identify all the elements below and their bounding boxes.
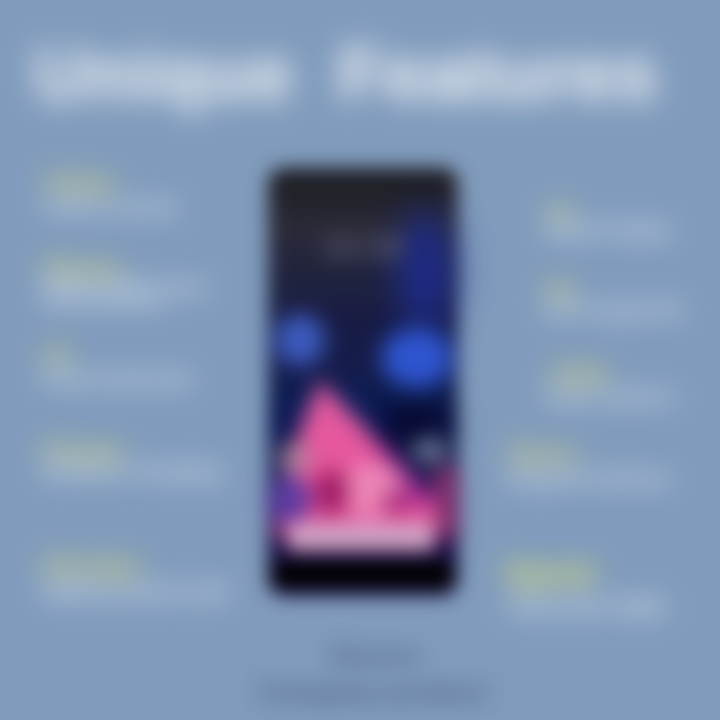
feature 2 left: Photo <box>42 253 121 284</box>
feature 5 left: Design <box>42 549 142 582</box>
feature 1 left: Video <box>42 167 118 198</box>
feature 4 right: Store <box>507 438 579 469</box>
feature 2 right: Hi <box>545 275 573 306</box>
blue blobs <box>275 314 453 388</box>
feature 1 left: Vision screen <box>42 196 178 219</box>
footer note <box>257 640 488 710</box>
feature 4 left: Wireless charging <box>42 460 223 483</box>
feature list: left column <box>32 163 230 611</box>
feature 5 left: Military grade built <box>42 581 229 604</box>
footer line 2: Company product <box>257 677 488 707</box>
feature 1 right: AI <box>545 196 573 227</box>
feature 2 right <box>536 274 684 328</box>
feature 4 right <box>500 435 670 497</box>
feature 4 left: Power <box>42 435 126 466</box>
feature 5 left <box>34 546 230 611</box>
feature 4 right: Expand memory <box>507 467 670 490</box>
feature 2 left: Wide angle lens+ <box>42 276 213 299</box>
feature 5 right: Octa core chips <box>509 595 667 618</box>
feature 4 left <box>33 432 225 491</box>
feature 3 left: UI <box>42 339 70 370</box>
feature 2 left: with manual mode <box>42 294 164 310</box>
feature 3 right: Face unlock I <box>545 386 678 409</box>
feature 5 right: Speed <box>504 557 594 590</box>
feature list: right column <box>496 196 684 627</box>
feature 1 left <box>36 163 178 224</box>
feature 5 right <box>496 552 669 627</box>
feature 3 right <box>540 354 678 414</box>
phone <box>252 154 479 610</box>
feature 3 left: Float shortcuts <box>42 368 194 391</box>
title: Unique Features <box>34 32 658 116</box>
feature 1 right <box>537 196 673 249</box>
pink mountain <box>268 380 458 538</box>
clock text: 10:08 <box>322 229 404 265</box>
feature 3 right: Safe <box>550 358 609 389</box>
feature 3 left <box>34 339 194 396</box>
bottom bar <box>272 523 454 587</box>
feature 2 left <box>32 248 213 318</box>
footer line 1: Source <box>329 640 421 670</box>
feature 2 right: Hi-Fi quad DA <box>545 299 684 322</box>
phone body <box>268 168 458 596</box>
screen wallpaper <box>268 210 458 587</box>
feature 1 right: Smart helper <box>545 219 673 242</box>
